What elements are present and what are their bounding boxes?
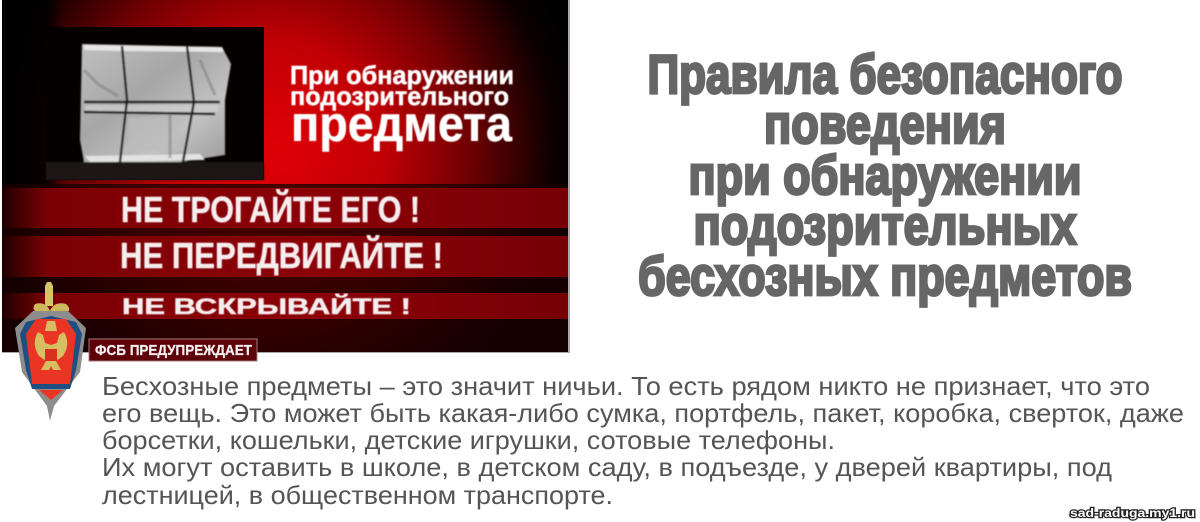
- poster stripes: [2, 184, 568, 352]
- poster heading: При обнаружении: [290, 60, 514, 90]
- poster warnings: НЕ ВСКРЫВАЙТЕ !: [122, 294, 411, 319]
- body text: Их могут оставить в школе, в детском саду, в подъезде, у дверей квартиры, под: [102, 452, 1112, 482]
- poster warnings: [120, 188, 443, 319]
- poster heading: подозрительного: [290, 81, 509, 111]
- emblem: double-headed eagle: [35, 321, 67, 370]
- body text: [102, 371, 1184, 510]
- panel: warning poster: [2, 0, 570, 353]
- poster warnings: НЕ ПЕРЕДВИГАЙТЕ !: [120, 234, 443, 276]
- body text: Бесхозные предметы – это значит ничьи. То есть рядом никто не признает, что это: [102, 371, 1150, 401]
- body text: лестницей, в общественном транспорте.: [102, 480, 613, 510]
- title: поведения: [764, 93, 1006, 155]
- poster warnings: НЕ ТРОГАЙТЕ ЕГО !: [121, 188, 420, 230]
- watermark: site address: sad-raduga.my1.ru: [1070, 506, 1195, 520]
- poster heading: предмета: [291, 96, 513, 152]
- label: FSB warns: ФСБ ПРЕДУПРЕЖДАЕТ: [95, 342, 252, 359]
- title: при обнаружении: [688, 144, 1082, 206]
- body text: борсетки, кошельки, детские игрушки, сотовые телефоны.: [102, 425, 835, 455]
- icon: FSB shield emblem: [15, 282, 86, 421]
- title: подозрительных: [694, 194, 1077, 256]
- title: [638, 43, 1132, 307]
- body text: его вещь. Это может быть какая-либо сумка, портфель, пакет, коробка, сверток, даже: [102, 398, 1184, 428]
- photo: suspicious package: [46, 27, 264, 180]
- poster heading: [290, 60, 514, 152]
